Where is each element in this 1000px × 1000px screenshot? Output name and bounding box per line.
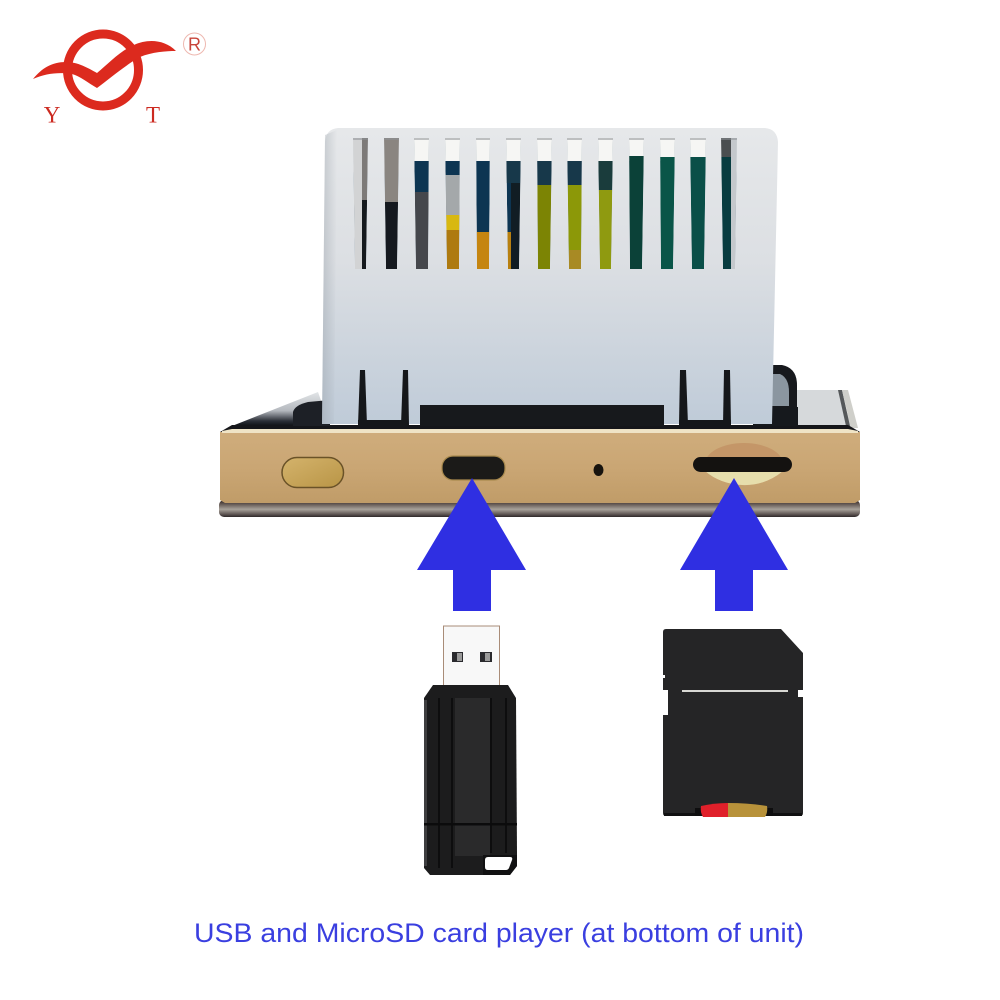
glass dark rim (220, 425, 860, 432)
mounting foot right lower (753, 407, 798, 426)
pin hole (594, 464, 604, 476)
USB cap seam (424, 823, 517, 826)
enclosure left edge shading (322, 130, 337, 424)
dark connector strip (420, 405, 664, 426)
logo: YT red ring with check swoosh (33, 33, 206, 128)
USB metal plug (444, 626, 500, 686)
USB port (442, 456, 505, 480)
enclosure notches (358, 370, 367, 425)
infographic canvas (33, 30, 860, 948)
SD card body (663, 629, 803, 816)
logo letter Y: Y (44, 102, 61, 128)
logo ring (68, 34, 138, 106)
mounting foot right arm (772, 365, 797, 408)
USB edge highlight (424, 700, 427, 866)
logo letter T: T (146, 102, 160, 128)
SD card line (682, 690, 788, 692)
glass front panel right (795, 390, 852, 428)
MicroSD slot (693, 457, 792, 472)
glass front panel left (232, 392, 330, 426)
white plastic enclosure with ventilation slots (322, 128, 778, 424)
caption: USB and MicroSD card player (at bottom of unit) (194, 918, 804, 948)
device: thermostat unit seen from below (219, 128, 860, 517)
SD card adapter (663, 629, 803, 817)
MicroSD finger recess (705, 443, 783, 485)
gold highlight top edge (222, 429, 858, 433)
USB ridge lines (438, 698, 507, 868)
SD tab notches (695, 808, 701, 816)
arrow: up to MicroSD slot (680, 478, 788, 611)
mounting foot left (293, 400, 330, 426)
USB flash drive (424, 626, 517, 875)
enclosure internals seen through slots (353, 138, 737, 269)
power button (282, 458, 344, 488)
SD card bottom edge (664, 813, 802, 816)
registered mark (184, 33, 206, 55)
USB body (424, 685, 517, 875)
arrow: up to USB port (417, 478, 526, 611)
USB lanyard hole (485, 857, 512, 870)
SD tab red (701, 803, 728, 817)
logo swoosh (33, 41, 176, 88)
registered mark: R (188, 34, 201, 54)
gold metal side face (220, 432, 860, 503)
SD tab gold (728, 803, 767, 817)
USB centre stripe (455, 698, 490, 856)
USB lanyard frame (483, 855, 517, 875)
USB plug holes (452, 652, 463, 662)
bottom dark bezel (219, 500, 860, 517)
